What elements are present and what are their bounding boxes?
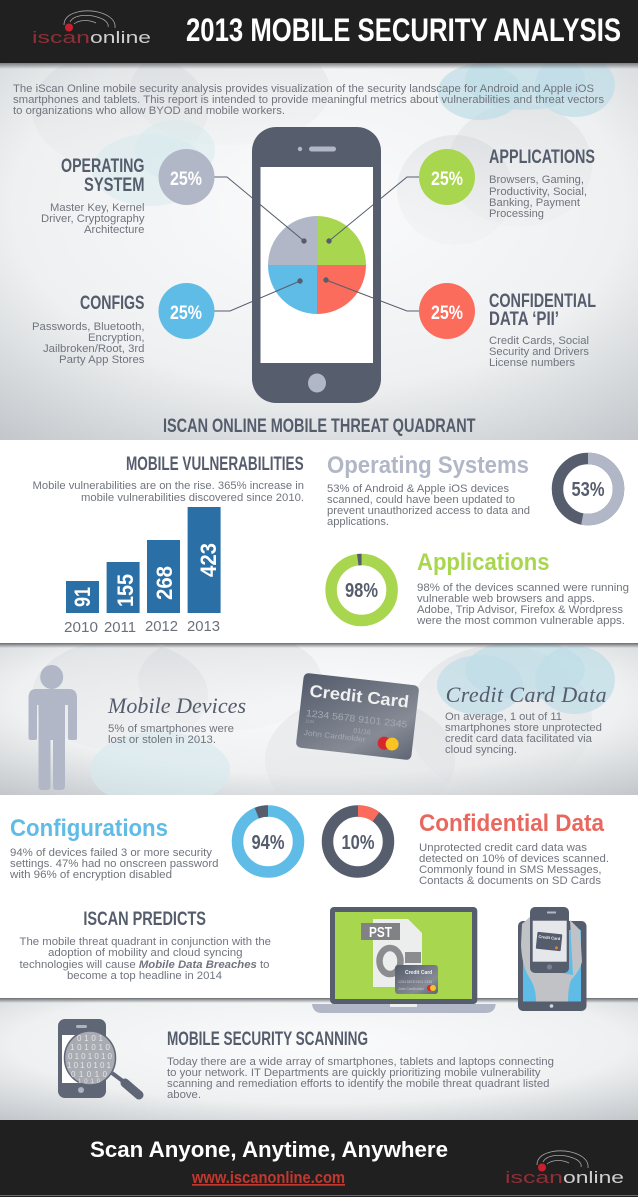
text block: mobile vulnerabilities: MOBILE VULNERABILITIES <box>126 453 304 475</box>
text block: applications: Productivity, Social, <box>489 186 587 198</box>
icon: credit card: Credit Card <box>309 681 410 712</box>
icon: magnifier over phone: 101010 <box>70 1043 111 1052</box>
icon: magnifier over phone: 0101010 <box>68 1052 113 1061</box>
intro text: to organizations who allow BYOD and mobile workers. <box>13 105 285 117</box>
text block: applications stat <box>416 549 629 627</box>
text block: mobile vulnerabilities <box>32 453 304 504</box>
icon: magnifier over phone: 1010 <box>78 1079 101 1085</box>
icon: credit card: 1234 5678 9101 2345 <box>305 708 408 731</box>
text block: mobile devices: lost or stolen in 2013. <box>108 734 216 746</box>
phone illustration <box>252 127 381 403</box>
text block: configs: CONFIGS <box>80 292 144 314</box>
logo: iScan Online footer: online <box>563 1168 624 1187</box>
bar chart: vulnerabilities per year: 2012 <box>145 619 178 635</box>
bar chart: vulnerabilities per year: 423 <box>196 543 221 577</box>
text block: operating system: Driver, Cryptography <box>41 213 145 225</box>
bar chart: vulnerabilities per year: 2010 <box>64 620 98 636</box>
callout: confidential data 25%: 25% <box>431 303 463 324</box>
donut chart: 98%: 98% <box>345 580 378 602</box>
text block: mobile devices: 5% of smartphones were <box>108 723 234 735</box>
icon: magnifier over phone <box>58 1019 139 1098</box>
icon: laptop with PST file: 1234 5678 9101 2345 <box>398 980 432 984</box>
icon: magnifier over phone: 1010101 <box>67 1061 112 1070</box>
text block: iscan predicts: adoption of mobility and cloud syncing <box>48 947 243 959</box>
text block: applications stat: 98% of the devices scanned were running <box>417 582 629 594</box>
bar chart: vulnerabilities per year <box>64 507 221 636</box>
logo: iScan Online footer: iscan <box>505 1168 563 1187</box>
icon: credit card: 01/16 <box>353 728 371 737</box>
text block: iscan predicts: ISCAN PREDICTS <box>83 908 206 930</box>
text block: iscan predicts: The mobile threat quadrant in conjunction with the <box>20 936 271 948</box>
icon: laptop with PST file: Credit Card <box>405 970 432 976</box>
intro text <box>13 83 605 117</box>
text block: credit card data: credit card data facilitated via <box>445 733 593 745</box>
text block: iscan predicts: technologies will cause Mobile Data Breaches to <box>20 959 270 971</box>
callout: configs 25% <box>158 283 214 339</box>
bar chart: vulnerabilities per year: 155 <box>113 574 138 607</box>
logo: iScan Online header <box>32 11 151 47</box>
bar chart: vulnerabilities per year: 2011 <box>104 620 136 636</box>
text block: operating system: OPERATING <box>61 155 144 177</box>
text block: credit card data <box>445 682 607 756</box>
callout: operating system 25% <box>158 149 214 205</box>
heading: threat quadrant: ISCAN ONLINE MOBILE THREAT QUADRANT <box>163 415 476 437</box>
bar chart: vulnerabilities per year: 2013 <box>187 619 220 635</box>
text block: mobile vulnerabilities: mobile vulnerabilities discovered since 2010. <box>81 492 304 504</box>
panel: threat quadrant background <box>0 35 638 440</box>
text block: confidential data stat: detected on 10% of devices scanned. <box>419 853 609 865</box>
text block: operating system <box>41 155 145 236</box>
connector lines <box>214 177 419 311</box>
text block: applications: APPLICATIONS <box>489 146 595 168</box>
text block: applications: Browsers, Gaming, <box>489 174 584 186</box>
icon: hand holding phone over tablet: Credit Card <box>538 934 561 941</box>
text block: mobile security scanning: scanning and remediation efforts to identify the mobile threat quadrant listed <box>167 1078 550 1090</box>
text block: mobile devices <box>107 693 246 746</box>
text block: mobile devices: Mobile Devices <box>107 693 246 718</box>
text block: operating system: Architecture <box>84 224 144 236</box>
text block: iscan predicts: become a top headline in 2014 <box>67 970 222 982</box>
text block: credit card data: cloud syncing. <box>445 744 517 756</box>
bar chart: vulnerabilities per year: 268 <box>152 566 177 600</box>
icon: credit card: John Cardholder <box>303 728 367 744</box>
header bar <box>0 0 638 63</box>
text block: mobile security scanning <box>167 1028 554 1101</box>
text block: configs <box>32 292 145 366</box>
intro text: The iScan Online mobile security analysis provides visualization of the security landscape for Android and Apple iOS <box>13 83 594 95</box>
text block: confidential data stat: Unprotected credit card data was <box>419 842 588 854</box>
icon: laptop with PST file <box>312 907 496 1013</box>
text block: confidential data: Credit Cards, Social <box>489 335 589 347</box>
text block: applications: Processing <box>489 208 544 220</box>
text block: confidential data <box>489 290 596 369</box>
text block: credit card data: On average, 1 out of 11 <box>445 711 562 723</box>
text block: mobile security scanning: MOBILE SECURITY SCANNING <box>167 1028 368 1050</box>
text block: operating system: SYSTEM <box>84 174 144 196</box>
logo: iScan Online header: iscan <box>32 28 90 47</box>
text block: credit card data: smartphones store unprotected <box>445 722 602 734</box>
text block: confidential data: Security and Drivers <box>489 346 589 358</box>
text block: operating systems <box>327 452 530 528</box>
text block: credit card data: Credit Card Data <box>446 682 607 707</box>
text block: confidential data stat: Commonly found in SMS Messages, <box>419 864 602 876</box>
text block: applications stat: were the most common vulnerable apps. <box>416 615 625 627</box>
text block: operating systems: scanned, could have been updated to <box>327 494 515 506</box>
text block: mobile security scanning: Today there are a wide array of smartphones, tablets and laptops connecting <box>167 1056 554 1068</box>
callout: applications 25%: 25% <box>431 169 463 190</box>
text block: configurations: Configurations <box>10 815 168 842</box>
text block: applications <box>489 146 595 220</box>
text block: configurations: 94% of devices failed 3 or more security <box>10 847 213 859</box>
text block: configurations: with 96% of encryption disabled <box>9 869 172 881</box>
callout: operating system 25%: 25% <box>170 169 202 190</box>
callout: configs 25%: 25% <box>170 303 202 324</box>
icon: hand holding phone over tablet <box>518 907 586 1011</box>
icon: magnifier over phone: 01010 <box>71 1070 108 1079</box>
text block: applications: Banking, Payment <box>489 197 580 209</box>
icon: laptop with PST file: PST <box>369 924 392 941</box>
footer url: www.iscanonline.com <box>191 1168 345 1187</box>
icon: magnifier over phone: 0101 <box>77 1034 104 1043</box>
text block: applications stat: Applications <box>417 549 550 576</box>
callout: applications 25% <box>419 149 475 205</box>
donut chart: 98% <box>328 556 396 624</box>
text block: configs: Encryption, <box>88 332 144 344</box>
text block: operating systems: 53% of Android & Apple iOS devices <box>327 483 510 495</box>
icon: laptop with PST file: John Cardholder <box>398 987 425 991</box>
text block: configs: Passwords, Bluetooth, <box>32 321 144 333</box>
donut chart: 10%: 10% <box>342 832 375 854</box>
footer bar <box>0 1120 638 1197</box>
panel: devices and credit card background <box>0 643 638 795</box>
text block: confidential data: DATA ‘PII’ <box>489 308 559 330</box>
footer tagline: Scan Anyone, Anytime, Anywhere <box>90 1137 448 1162</box>
text block: operating systems: Operating Systems <box>327 452 529 479</box>
panel: mobile security scanning background <box>0 998 638 1120</box>
text block: mobile security scanning: to your network. IT Departments are quickly prioritizing mobile vulnerability <box>167 1067 541 1079</box>
text block: mobile security scanning: above. <box>167 1089 201 1101</box>
donut chart: 10% <box>328 811 388 872</box>
text block: configurations <box>9 815 218 881</box>
text block: configs: Party App Stores <box>59 354 145 366</box>
donut chart: 53%: 53% <box>572 479 605 501</box>
text block: applications stat: Adobe, Trip Advisor, Firefox & Wordpress <box>417 604 623 616</box>
text block: configurations: settings. 47% had no onscreen password <box>10 858 218 870</box>
intro text: smartphones and tablets. This report is intended to provide meaningful metrics about vulnerabilities and threat vectors <box>13 94 605 106</box>
text block: iscan predicts <box>20 908 271 982</box>
donut chart: 94% <box>228 802 308 881</box>
text block: confidential data: License numbers <box>489 357 575 369</box>
text block: mobile vulnerabilities: Mobile vulnerabilities are on the rise. 365% increase in <box>32 480 304 492</box>
donut chart: 94%: 94% <box>252 832 285 854</box>
text block: configs: Jailbroken/Root, 3rd <box>43 343 144 355</box>
bar chart: vulnerabilities per year: 91 <box>70 587 95 607</box>
text block: operating systems: prevent unauthorized access to data and <box>327 505 530 517</box>
text block: confidential data stat <box>419 810 609 887</box>
text block: operating systems: applications. <box>327 516 389 528</box>
donut chart: 53% <box>558 458 618 520</box>
callout: confidential data 25% <box>419 283 475 339</box>
logo: iScan Online header: online <box>90 28 151 47</box>
text block: confidential data: CONFIDENTIAL <box>489 290 596 312</box>
icon: person <box>28 665 77 790</box>
icon: credit card: 1234 <box>305 718 315 724</box>
logo: iScan Online footer <box>505 1151 624 1187</box>
text block: confidential data stat: Contacts & documents on SD Cards <box>419 875 602 887</box>
pie chart: threat quadrant <box>268 216 366 314</box>
text block: confidential data stat: Confidential Data <box>419 810 605 837</box>
icon: credit card <box>296 673 419 760</box>
text block: operating system: Master Key, Kernel <box>50 202 144 214</box>
text block: applications stat: vulnerable web browsers and apps. <box>417 593 595 605</box>
